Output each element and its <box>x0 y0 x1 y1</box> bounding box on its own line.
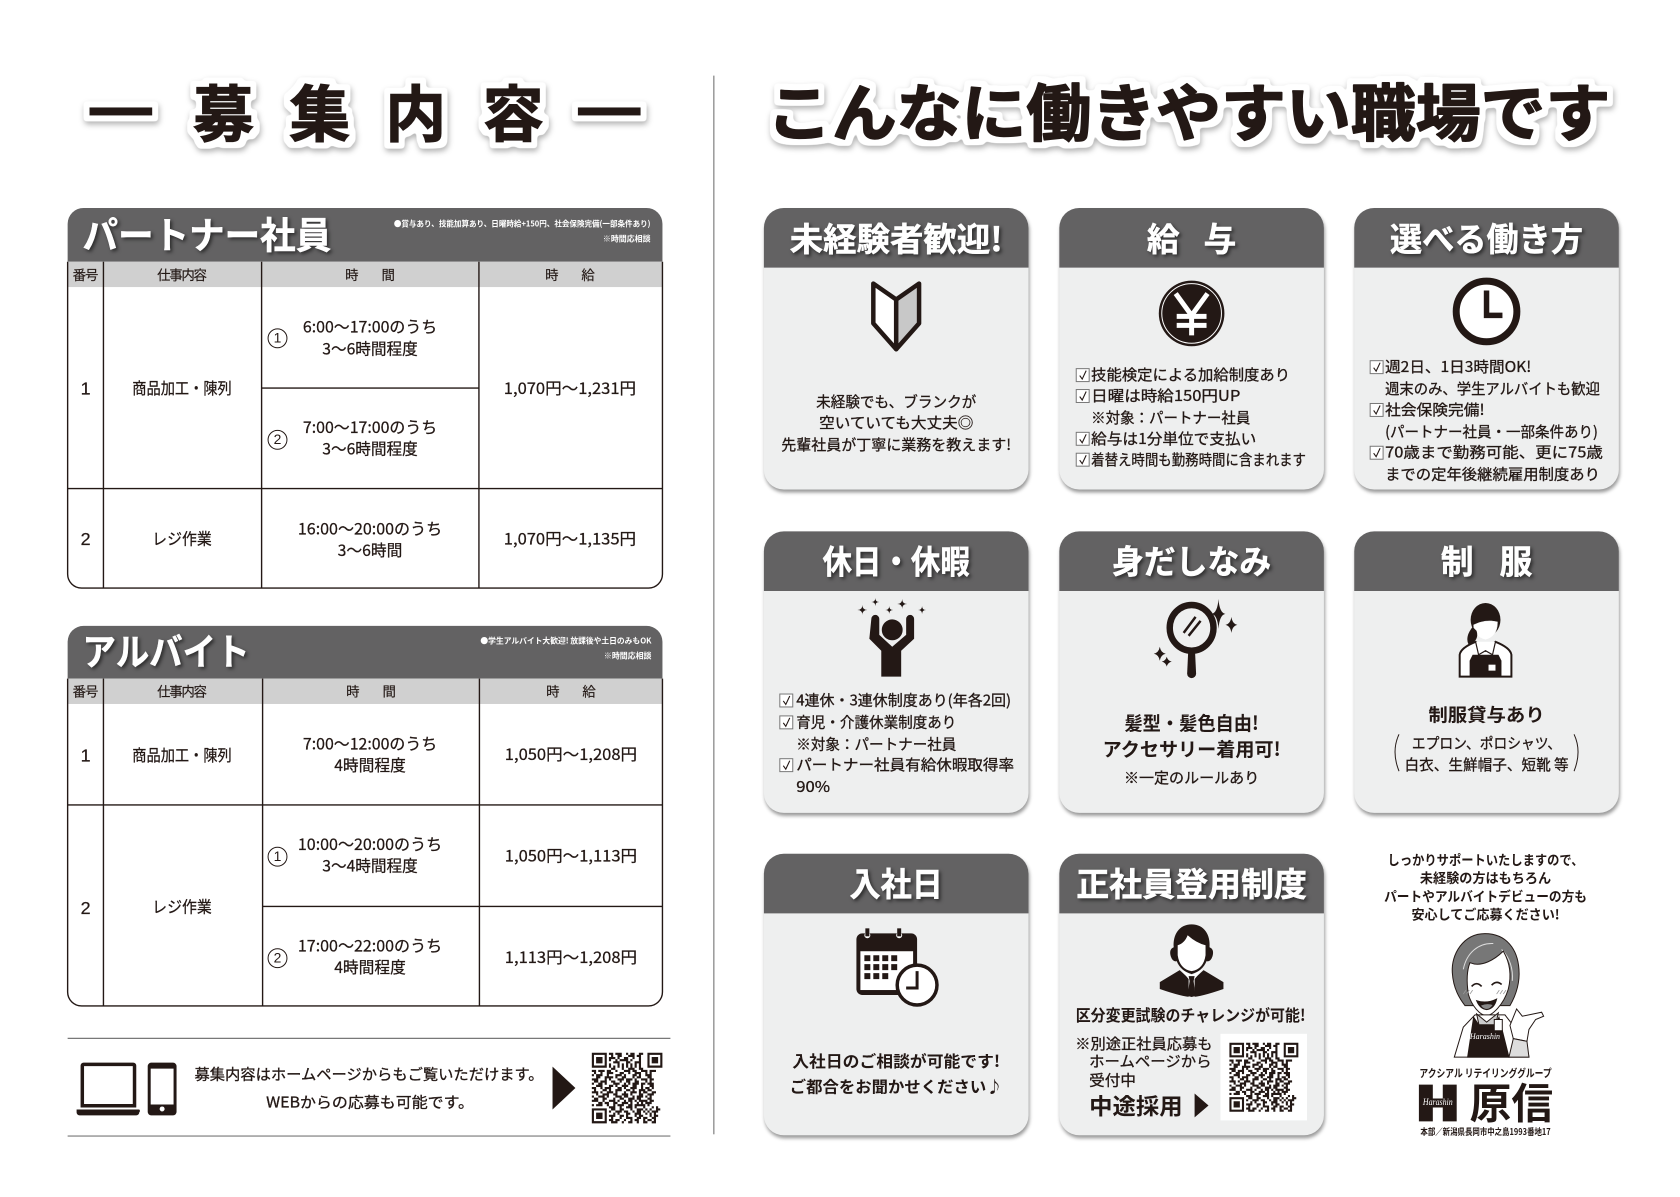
row 1: 3～6時間程度 <box>322 437 418 460</box>
text: support message <box>1384 849 1587 924</box>
text: 中途採用案内: ※別途正社員応募も <box>1075 1033 1213 1054</box>
row 2: 1,070円～1,135円 <box>504 526 636 549</box>
text: support message: 安心してご応募ください! <box>1411 904 1560 924</box>
icon: smartphone <box>148 1063 177 1115</box>
row 1 <box>81 314 636 460</box>
text: 中途採用案内: ホームページから <box>1089 1051 1212 1072</box>
text <box>1395 702 1578 775</box>
heading: 休日・休暇 <box>823 537 970 584</box>
text <box>790 1049 1003 1097</box>
logo mark: H: Harashin <box>1422 1097 1453 1108</box>
row 2: 2 <box>81 529 91 549</box>
column headers: 番号 <box>73 681 98 701</box>
checklist: ※対象：パートナー社員 <box>796 733 956 754</box>
QR code <box>1220 1034 1307 1120</box>
vertical divider <box>713 76 714 1134</box>
column headers: 時 給 <box>546 681 596 701</box>
arrow <box>553 1067 575 1109</box>
checklist: 着替え時間も勤務時間に含まれます <box>1091 449 1306 470</box>
title dash: right <box>578 107 641 115</box>
text: banner message: 募集内容はホームページからもご覧いただけます。 <box>194 1064 544 1085</box>
panel: web application banner <box>68 1038 670 1137</box>
text: support message: パートやアルバイトデビューの方も <box>1384 886 1587 906</box>
icon: businessman <box>1160 924 1223 997</box>
text: 中途採用案内: 中途採用 <box>1089 1088 1183 1122</box>
row 2: 4時間程度 <box>334 955 406 978</box>
text: support message: しっかりサポートいたしますので、 <box>1388 849 1584 869</box>
QR code <box>592 1053 662 1123</box>
text: アクセサリー着用可! <box>1103 735 1281 762</box>
panel: 身だしなみ <box>1059 531 1324 813</box>
checklist: 社会保険完備! <box>1385 399 1485 420</box>
checklist <box>1370 356 1603 485</box>
text: 入社日のご相談が可能です! <box>792 1049 1000 1072</box>
heading: 正社員登用制度 <box>1076 859 1307 906</box>
panel: 入社日 <box>764 854 1028 1135</box>
text: 中途採用案内: 受付中 <box>1089 1070 1136 1091</box>
heading: 選べる働き方 <box>1390 214 1583 261</box>
row 2: 1,050円～1,113円 <box>505 844 637 867</box>
panel: アルバイト table <box>68 622 662 1006</box>
text: 区分変更試験: 区分変更試験のチャレンジが可能! <box>1076 1003 1306 1026</box>
row 2: レジ作業 <box>152 526 212 549</box>
text: ご都合をお聞かせください♪ <box>790 1074 1003 1097</box>
column headers <box>73 681 596 701</box>
column headers: 時 間 <box>346 681 396 701</box>
row 2: 2 <box>81 898 91 918</box>
column headers <box>73 264 595 284</box>
row 2: 3～6時間 <box>338 538 402 561</box>
row 1: 1 <box>81 379 91 399</box>
text: support message: 未経験の方はもちろん <box>1420 867 1551 887</box>
column headers: 仕事内容 <box>157 681 207 701</box>
row 1 <box>81 731 637 776</box>
checklist: 週2日、1日3時間OK! <box>1385 356 1531 377</box>
note: 賞与など: ●賞与あり、技能加算あり、日曜時給+150円、社会保険完備(一部条件あり) <box>394 219 651 230</box>
text: 空いていても大丈夫◎ <box>819 412 973 433</box>
icon: calendar with clock <box>856 928 937 1005</box>
illustration: staff woman <box>1452 934 1544 1057</box>
text <box>1103 709 1281 788</box>
heading: 制 服 <box>1441 537 1532 584</box>
checklist: 週末のみ、学生アルバイトも歓迎 <box>1385 378 1600 399</box>
row 1: 1 <box>81 746 91 766</box>
logo: 原信 <box>1419 1065 1553 1138</box>
text <box>781 391 1011 455</box>
row 2: 1,113円～1,208円 <box>505 945 637 968</box>
checklist: 4連休・3連休制度あり(年各2回) <box>796 689 1011 710</box>
panel: パートナー社員 table <box>68 205 662 588</box>
row 1: 7:00～12:00のうち <box>303 731 437 754</box>
checklist: (パートナー社員・一部条件あり) <box>1385 421 1598 442</box>
note: 時間応相談: ※時間応相談 <box>604 650 652 661</box>
row 2 <box>81 516 636 561</box>
heading: 身だしなみ <box>1112 537 1271 584</box>
title dash: left <box>90 107 152 115</box>
icon: clock <box>1456 281 1517 342</box>
row 1: 6:00～17:00のうち <box>303 314 437 337</box>
checklist: ※対象：パートナー社員 <box>1091 407 1250 428</box>
column headers: 番号 <box>73 264 98 284</box>
panel: 正社員登用制度 <box>1059 854 1324 1135</box>
row 1: 1 <box>274 330 282 346</box>
checklist: 技能検定による加給制度あり <box>1091 364 1290 385</box>
row 2: 10:00～20:00のうち <box>298 832 442 855</box>
row 1: 2 <box>274 431 282 447</box>
logo: 原信: アクシアル リテイリンググループ <box>1419 1065 1552 1081</box>
text: banner message: WEBからの応募も可能です。 <box>266 1091 474 1112</box>
heading: 入社日 <box>849 859 943 906</box>
row 1: 4時間程度 <box>334 753 406 776</box>
icon: laptop <box>77 1063 140 1115</box>
row 1: 商品加工・陳列 <box>132 376 232 399</box>
panel: 未経験者歓迎! <box>764 208 1028 490</box>
text: 先輩社員が丁寧に業務を教えます! <box>781 434 1011 455</box>
checklist: パートナー社員有給休暇取得率 <box>796 754 1014 775</box>
checklist: 日曜は時給150円UP <box>1091 385 1240 406</box>
checklist: 70歳まで勤務可能、更に75歳 <box>1385 442 1603 463</box>
row 2: 2 <box>274 949 282 965</box>
row 2: 3～4時間程度 <box>322 854 418 877</box>
panel: 休日・休暇 <box>764 531 1028 813</box>
heading: パートナー社員: パートナー社員 <box>83 205 331 259</box>
column headers: 仕事内容 <box>157 264 207 284</box>
row 1: 商品加工・陳列 <box>132 743 232 766</box>
checklist: までの定年後継続雇用制度あり <box>1385 464 1600 485</box>
note: 学生アルバイト: ●学生アルバイト大歓迎! 放課後や土日のみもOK <box>480 635 652 646</box>
checklist: 給与は1分単位で支払い <box>1091 428 1256 449</box>
title: こんなに働きやすい職場です: こんなに働きやすい職場です <box>767 64 1610 154</box>
title: 募集内容 <box>90 67 641 154</box>
checklist: 育児・介護休業制度あり <box>796 711 956 732</box>
row 2 <box>81 832 637 978</box>
text: banner message <box>194 1064 544 1112</box>
icon: person with raised arms <box>857 598 926 677</box>
logo text: 原信 <box>1470 1072 1553 1132</box>
text: 白衣、生鮮帽子、短靴 等 <box>1404 754 1569 775</box>
row 1: 3～6時間程度 <box>322 336 418 359</box>
icon: beginner mark <box>873 284 919 349</box>
row 2: レジ作業 <box>152 894 212 917</box>
panel: 給与 <box>1059 208 1324 490</box>
column headers: 時 給 <box>545 264 595 284</box>
heading: 給 与 <box>1147 214 1236 261</box>
heading: アルバイト: アルバイト <box>83 622 250 676</box>
heading: 未経験者歓迎! <box>790 214 1003 261</box>
row 2: 1 <box>274 848 282 864</box>
icon: yen <box>1159 281 1224 346</box>
note: 時間応相談: ※時間応相談 <box>603 234 651 245</box>
row 1: 1,070円～1,231円 <box>504 376 636 399</box>
icon: hand mirror <box>1154 599 1237 678</box>
row 1: 7:00～17:00のうち <box>303 415 437 438</box>
logo: 原信: 本部／新潟県長岡市中之島1993番地17 <box>1420 1125 1551 1138</box>
column headers: 時 間 <box>345 264 395 284</box>
row 2: 16:00～20:00のうち <box>298 516 442 539</box>
row 2: 17:00～22:00のうち <box>298 933 442 956</box>
row 1: 1,050円～1,208円 <box>505 742 637 765</box>
title: 募集内容: 募集内容 <box>193 67 544 154</box>
checklist: 90% <box>796 776 830 797</box>
checklist <box>1076 364 1306 470</box>
panel: 制服 <box>1354 531 1619 813</box>
text: 未経験でも、ブランクが <box>816 391 976 412</box>
icon: woman in apron <box>1460 603 1511 677</box>
text: 制服貸与あり <box>1428 702 1545 728</box>
text: 中途採用案内 <box>1075 1033 1213 1122</box>
panel: 選べる働き方 <box>1354 208 1619 490</box>
illustration: staff woman: Harashin <box>1469 1032 1500 1041</box>
text: ※一定のルールあり <box>1124 767 1259 788</box>
checklist <box>780 689 1014 797</box>
text: エプロン、ポロシャツ、 <box>1412 732 1561 753</box>
text: 髪型・髪色自由! <box>1124 709 1259 736</box>
